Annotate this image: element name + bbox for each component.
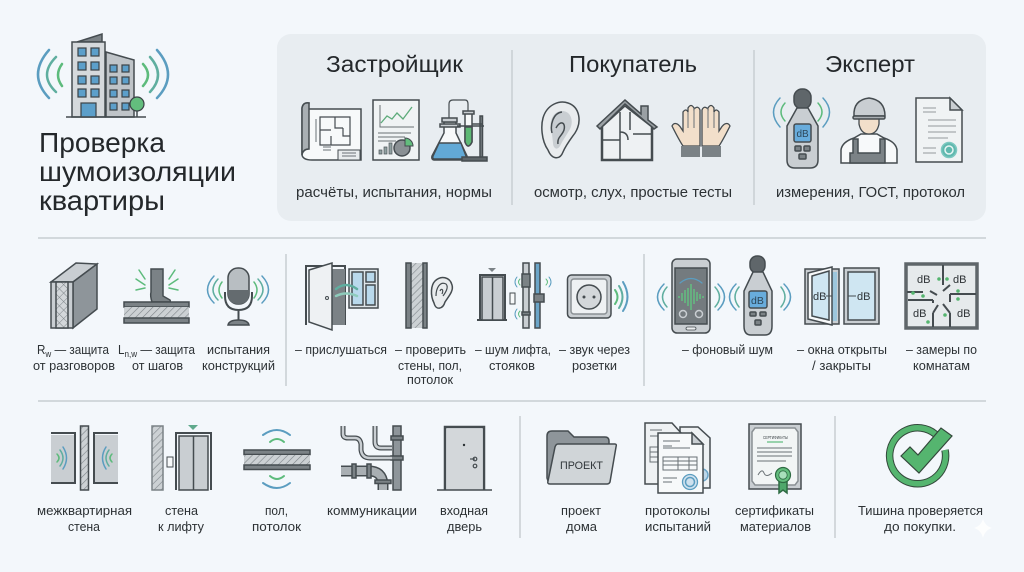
icon: sound level meter <box>774 89 830 168</box>
icon: apartment floor plan: dB <box>913 308 926 320</box>
icon: apartment floor plan <box>906 264 977 328</box>
icon: sound meter: dB <box>751 295 764 307</box>
caption: check walls: потолок <box>407 372 453 387</box>
icon: wall next to lift <box>152 425 211 490</box>
caption: background noise: – фоновый шум <box>682 342 773 357</box>
caption: door: дверь <box>447 519 482 534</box>
icon: apartment building with sound waves <box>38 34 168 117</box>
caption: check walls <box>395 342 466 387</box>
caption: door: входная <box>440 503 488 518</box>
icon: worker <box>841 98 897 163</box>
caption: lift wall <box>158 503 204 534</box>
icon: footstep on floor <box>124 269 189 323</box>
caption: rooms: – замеры по <box>906 342 977 357</box>
caption: protocols: испытаний <box>645 519 711 534</box>
caption: floor <box>252 503 301 534</box>
caption: windows: – окна открыты <box>797 342 887 357</box>
caption: Ln,w: от шагов <box>132 358 183 373</box>
caption: socket <box>559 342 630 373</box>
caption: party wall: межквартирная <box>37 503 132 518</box>
icon: sound level meter: dB <box>796 129 809 140</box>
icon: wall and ear <box>406 263 452 328</box>
caption: utilities: коммуникации <box>327 503 417 518</box>
icon: certificate: СЕРТИФИКАТЫ <box>763 435 788 440</box>
icon: wall socket <box>568 275 628 318</box>
title: квартиры <box>39 185 165 216</box>
caption: party wall <box>37 503 132 534</box>
caption: certificates: сертификаты <box>735 503 814 518</box>
caption: lift: – шум лифта, <box>475 342 551 357</box>
icon: green check <box>890 428 952 484</box>
icon: lab flask <box>432 100 487 161</box>
icon: hands <box>672 106 730 157</box>
icon: microphone <box>208 268 268 325</box>
caption: Rw <box>33 342 115 373</box>
icon: chart document <box>373 100 419 160</box>
caption: tests: испытания <box>207 342 270 357</box>
caption: rooms: комнатам <box>913 358 970 373</box>
caption: expert: измерения, ГОСТ, протокол <box>776 185 965 201</box>
caption: lift wall: стена <box>165 503 199 518</box>
caption: party wall: стена <box>68 519 101 534</box>
caption: listen: – прислушаться <box>295 342 387 357</box>
caption: conclusion <box>858 503 983 534</box>
caption: Ln,w: n,w <box>125 349 138 359</box>
icon: sparkle <box>974 519 992 538</box>
caption: socket: розетки <box>572 358 617 373</box>
caption: Ln,w: L <box>118 342 125 357</box>
caption: Rw: от разговоров <box>33 358 115 373</box>
caption: certificates: материалов <box>740 519 811 534</box>
icon: elevator and risers <box>477 263 551 328</box>
icon: open door and window <box>306 263 378 330</box>
icon: apartment floor plan: dB <box>957 308 970 320</box>
caption: Rw: w <box>45 349 52 359</box>
caption: check walls: – проверить <box>395 342 466 357</box>
caption: tests: конструкций <box>202 358 275 373</box>
caption: protocols <box>645 503 711 534</box>
caption: floor: потолок <box>252 519 301 534</box>
icon: apartment floor plan: dB <box>953 274 966 286</box>
icon: windows open and closed <box>805 267 879 325</box>
icon: apartment floor plan: dB <box>917 274 930 286</box>
icon: party wall <box>51 426 118 490</box>
caption: conclusion: Тишина проверяется <box>858 503 983 518</box>
caption: lift wall: к лифту <box>158 519 204 534</box>
title <box>39 127 236 216</box>
caption: windows: / закрыты <box>812 358 871 373</box>
title: шумоизоляции <box>39 156 236 187</box>
caption: lift: стояков <box>489 358 535 373</box>
icon: test protocols <box>645 423 710 493</box>
icon: windows open and closed: dB <box>813 291 826 303</box>
panel: roles <box>277 34 986 221</box>
caption: project <box>561 503 601 534</box>
icon: windows open and closed: dB <box>857 291 870 303</box>
caption: project: проект <box>561 503 601 518</box>
caption: buyer: осмотр, слух, простые тесты <box>534 185 732 201</box>
caption: lift <box>475 342 551 373</box>
title: Проверка <box>39 127 165 158</box>
caption: Ln,w <box>118 342 196 373</box>
heading: developer: Застройщик <box>326 51 464 77</box>
icon: pipes <box>341 426 403 490</box>
icon: certificate <box>749 424 801 493</box>
icon: floor slab with waves <box>244 430 310 488</box>
caption: protocols: протоколы <box>645 503 710 518</box>
caption: certificates <box>735 503 814 534</box>
icon: ear <box>542 102 579 158</box>
caption: developer: расчёты, испытания, нормы <box>296 185 492 201</box>
caption: tests <box>202 342 275 373</box>
caption: Rw: — защита <box>51 342 110 357</box>
caption: door <box>440 503 488 534</box>
icon: protocol document <box>916 98 962 162</box>
icon: project folder: ПРОЕКТ <box>560 460 603 472</box>
icon: project folder <box>547 431 616 484</box>
caption: floor: пол, <box>265 503 288 518</box>
icon: entrance door <box>437 427 492 490</box>
caption: check walls: стены, пол, <box>398 358 462 373</box>
icon: blueprint <box>302 103 361 160</box>
icon: sound meter <box>730 256 790 335</box>
icon: wall layers <box>51 263 97 328</box>
heading: expert: Эксперт <box>825 51 915 77</box>
icon: house plan <box>597 100 657 160</box>
caption: windows <box>797 342 887 373</box>
caption: project: дома <box>566 519 598 534</box>
caption: Rw: R <box>37 342 46 357</box>
icon: phone with sound app <box>658 259 724 333</box>
heading: buyer: Покупатель <box>569 51 697 77</box>
caption: conclusion: до покупки. <box>884 519 956 534</box>
caption: rooms <box>906 342 977 373</box>
caption: socket: – звук через <box>559 342 630 357</box>
caption: Ln,w: — защита <box>137 342 196 357</box>
